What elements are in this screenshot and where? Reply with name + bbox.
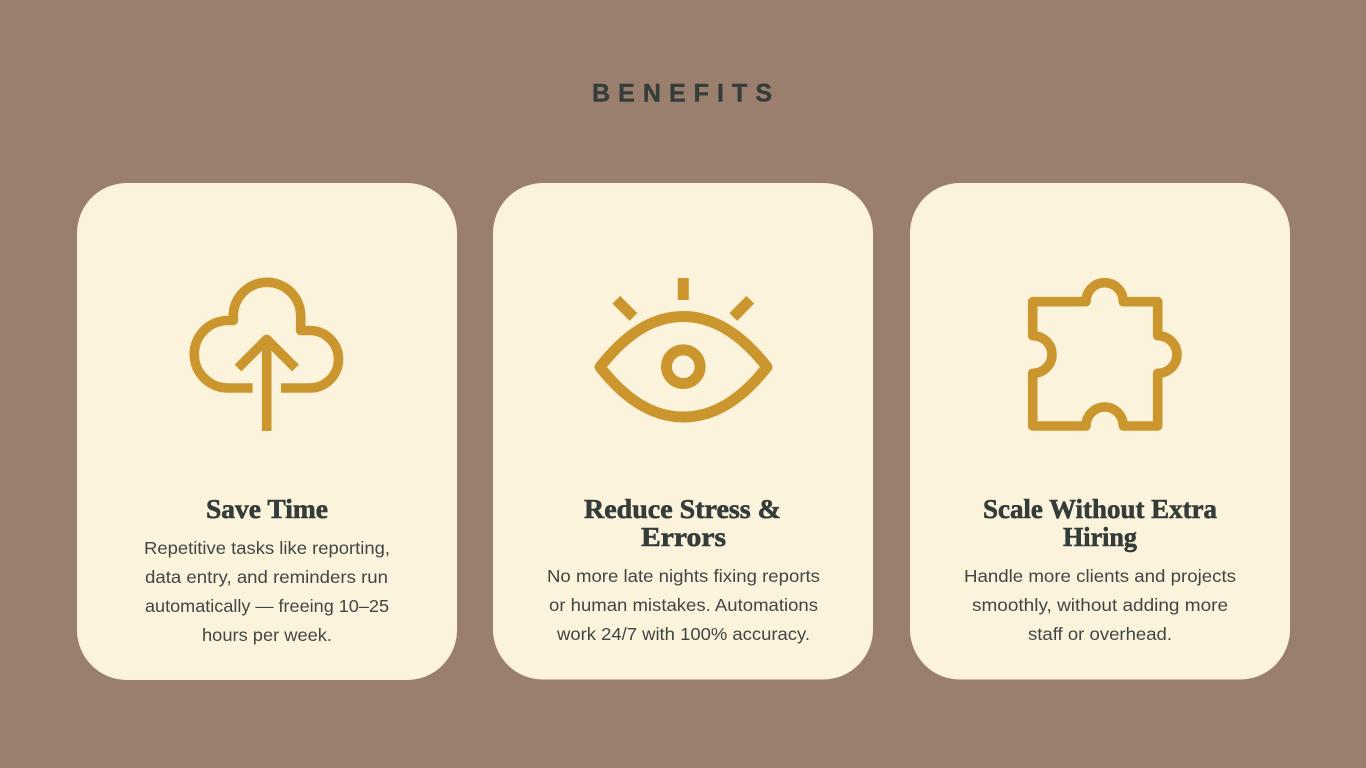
heading: reduce stress and errors: Reduce Stress & — [584, 494, 781, 524]
panel: scale without extra hiring — [910, 183, 1290, 680]
panel: save time — [77, 183, 457, 680]
heading: scale without extra hiring: Scale Without Extra — [983, 494, 1217, 524]
text: save time description: hours per week. — [202, 625, 332, 645]
heading: scale without extra hiring — [983, 494, 1217, 552]
text: save time description — [144, 538, 390, 645]
text: reduce stress description: work 24/7 with 100% accuracy. — [556, 624, 810, 644]
panel: reduce stress and errors — [493, 183, 873, 680]
title: BENEFITS — [592, 80, 772, 108]
heading: reduce stress and errors — [584, 494, 781, 552]
text: save time description: data entry, and reminders run — [145, 567, 388, 587]
icon: cloud upload — [194, 282, 338, 431]
icon: puzzle piece — [1033, 283, 1177, 426]
text: save time description: Repetitive tasks like reporting, — [144, 538, 390, 558]
heading: save time: Save Time — [206, 494, 328, 524]
heading: scale without extra hiring: Hiring — [1063, 522, 1137, 552]
text: reduce stress description — [547, 566, 820, 644]
text: reduce stress description: or human mistakes. Automations — [549, 595, 818, 615]
text: scale description: staff or overhead. — [1028, 624, 1172, 644]
text: scale description: Handle more clients and projects — [964, 566, 1236, 586]
icon: eye with rays — [600, 278, 767, 417]
text: save time description: automatically — freeing 10–25 — [145, 596, 389, 616]
heading: reduce stress and errors: Errors — [641, 522, 726, 552]
text: scale description: smoothly, without adding more — [972, 595, 1228, 615]
text: reduce stress description: No more late nights fixing reports — [547, 566, 820, 586]
text: scale description — [964, 566, 1236, 644]
